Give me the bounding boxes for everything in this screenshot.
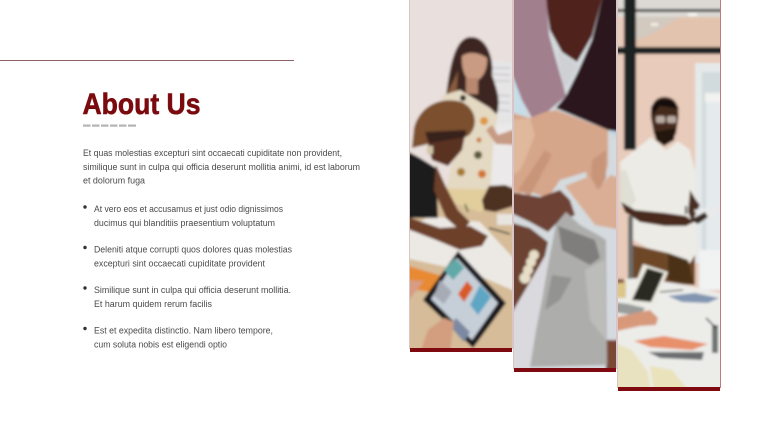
bullet list xyxy=(83,204,292,350)
photo 2: stacked hands xyxy=(509,0,621,373)
bullet 3: Similique sunt in culpa qui officia deserunt mollitia. xyxy=(94,285,291,295)
intro paragraph xyxy=(83,148,360,186)
bullet 4 xyxy=(83,326,273,350)
title: About Us xyxy=(82,88,200,121)
bullet 1 xyxy=(83,204,283,228)
intro paragraph: Et quas molestias excepturi sint occaecati cupiditate non provident, xyxy=(83,148,342,158)
bullet 3 xyxy=(83,285,291,309)
photo 1: colleagues around a table with a tablet xyxy=(405,0,517,353)
intro paragraph: et dolorum fuga xyxy=(83,176,145,186)
bullet 1: ducimus qui blanditiis praesentium voluptatum xyxy=(94,218,275,228)
bullet 1: At vero eos et accusamus et just odio dignissimos xyxy=(94,204,283,214)
bullet 2 xyxy=(83,244,292,268)
bullet 4: cum soluta nobis est eligendi optio xyxy=(94,340,227,350)
photo 3: presenter standing by a table xyxy=(613,0,725,392)
title underline dashes xyxy=(83,124,136,127)
bullet 2: Deleniti atque corrupti quos dolores quas molestias xyxy=(94,244,292,254)
bullet 3: Et harum quidem rerum facilis xyxy=(94,299,212,309)
intro paragraph: similique sunt in culpa qui officia deserunt mollitia animi, id est laborum xyxy=(83,162,360,172)
bullet 4: Est et expedita distinctio. Nam libero tempore, xyxy=(94,326,273,336)
bullet 2: excepturi sint occaecati cupiditate provident xyxy=(94,258,265,268)
